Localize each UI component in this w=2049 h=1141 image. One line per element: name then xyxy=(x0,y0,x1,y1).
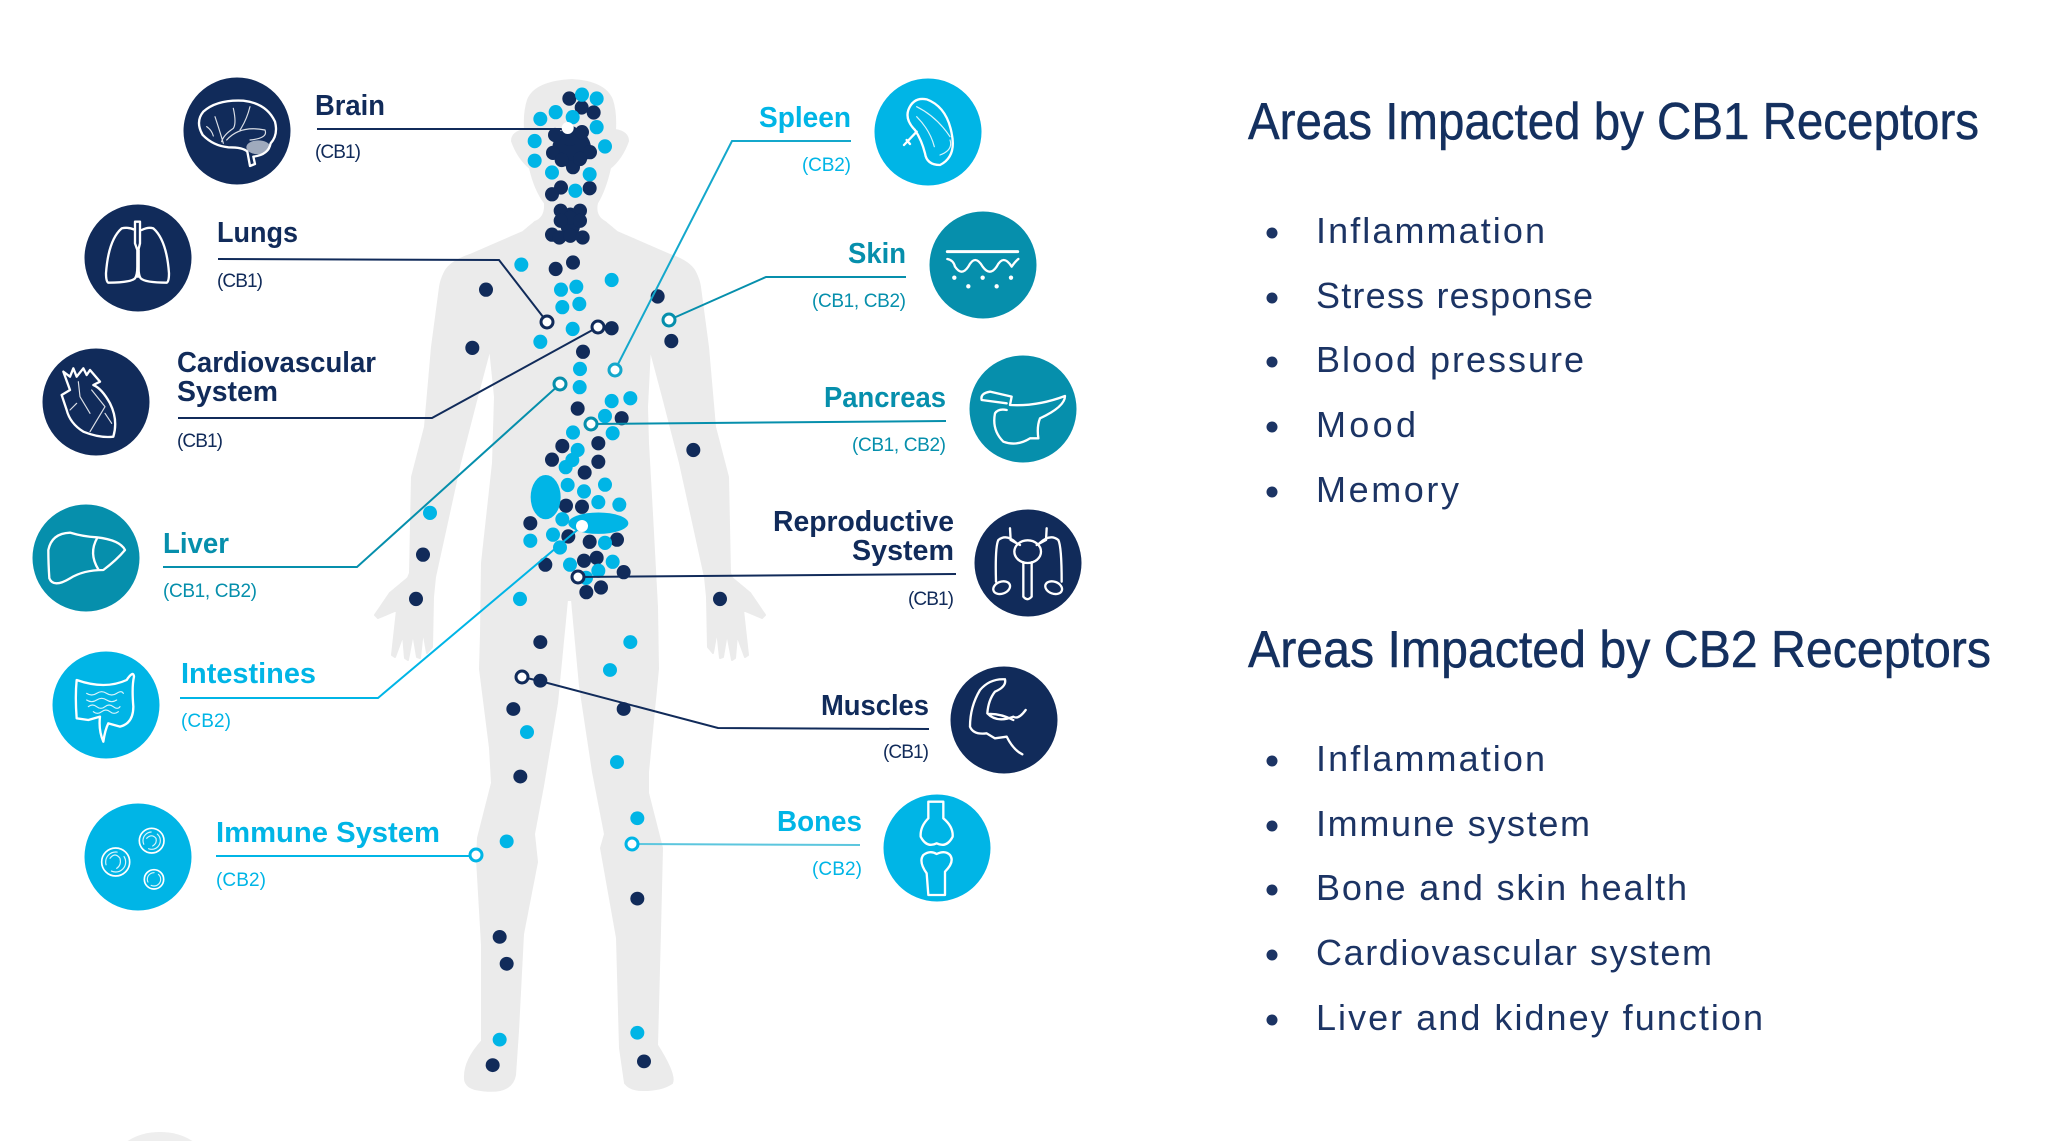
list: CB2 areas xyxy=(1266,738,1763,1038)
Skin receptor tag: (CB1, CB2) xyxy=(812,291,906,312)
Immune System leader line xyxy=(216,855,476,857)
label: Bones xyxy=(626,794,990,902)
Brain receptor tag: (CB1) xyxy=(315,142,361,163)
label: Intestines xyxy=(52,520,588,758)
System heading line: System xyxy=(852,535,954,567)
cyan CB2 dots upper body xyxy=(423,87,637,606)
Muscles heading: Muscles xyxy=(821,690,929,722)
receptor dots on legs xyxy=(486,635,651,1072)
icon: spleen xyxy=(874,78,982,186)
label: Immune System xyxy=(84,804,482,910)
Reproductive heading: Reproductive xyxy=(773,506,954,538)
list: CB1 areas xyxy=(1266,210,1593,510)
Cardiovascular heading: Cardiovascular xyxy=(177,347,376,379)
panel: CB2 receptor areas xyxy=(1248,621,1991,1038)
label: Pancreas xyxy=(585,356,1076,462)
Intestines marker xyxy=(576,520,588,532)
cyan CB2 dots legs xyxy=(493,635,644,1047)
list: CB1 areas: Blood pressure xyxy=(1316,339,1584,380)
Muscles receptor tag: (CB1) xyxy=(883,742,929,763)
label: Liver xyxy=(32,378,566,612)
Bones receptor tag: (CB2) xyxy=(812,859,862,880)
Intestines receptor tag: (CB2) xyxy=(181,711,231,732)
Spleen heading: Spleen xyxy=(759,102,851,134)
Liver marker xyxy=(554,378,566,390)
Immune System receptor tag: (CB2) xyxy=(216,870,266,891)
Brain marker xyxy=(562,122,574,134)
icon: knee joint bones xyxy=(884,794,990,902)
list: CB1 areas: Mood xyxy=(1316,404,1416,445)
Spleen marker xyxy=(609,364,621,376)
icon: immune cells xyxy=(84,804,192,910)
icon: lungs xyxy=(84,204,192,312)
Skin heading: Skin xyxy=(848,238,906,270)
Bones heading: Bones xyxy=(777,806,862,838)
label: Muscles xyxy=(516,666,1058,774)
Reproductive receptor tag: (CB1) xyxy=(908,589,954,610)
Muscles marker xyxy=(516,671,528,683)
Reproductive leader line xyxy=(578,574,956,577)
label: Cardiovascular System xyxy=(42,321,604,456)
label: Brain xyxy=(184,78,574,184)
list: CB2 areas: Bone and skin health xyxy=(1316,867,1687,908)
panel: CB1 receptor areas xyxy=(1248,93,1979,510)
list: CB1 areas: Memory xyxy=(1316,469,1459,510)
Intestines heading: Intestines xyxy=(181,658,316,690)
Cardiovascular leader line xyxy=(178,327,598,418)
Brain leader line xyxy=(317,128,567,130)
list: CB2 areas: Inflammation xyxy=(1316,738,1545,779)
receptor dots on body upper half xyxy=(409,87,727,606)
list: CB2 areas: Cardiovascular system xyxy=(1316,932,1712,973)
icon: brain xyxy=(184,78,290,184)
icon: intestines xyxy=(52,652,160,758)
heading: CB2: Areas Impacted by CB2 Receptors xyxy=(1248,621,1991,679)
bottom edge silhouette fragment xyxy=(116,1132,204,1141)
Immune System marker xyxy=(470,849,482,861)
Muscles leader line xyxy=(522,677,929,729)
icon: heart xyxy=(42,348,150,456)
label: Spleen xyxy=(609,78,982,376)
list: CB2 areas: Immune system xyxy=(1316,803,1590,844)
Immune System heading: Immune System xyxy=(216,817,440,849)
label: Lungs xyxy=(84,204,553,328)
Intestines leader line xyxy=(180,526,582,698)
label: Skin xyxy=(663,212,1036,326)
icon: pancreas xyxy=(970,356,1076,462)
list: CB2 areas: Liver and kidney function xyxy=(1316,997,1763,1038)
Pancreas leader line xyxy=(591,421,946,424)
Liver heading: Liver xyxy=(163,528,229,560)
icon: flexed arm muscle xyxy=(950,666,1058,774)
navy CB1 dots legs xyxy=(486,635,651,1072)
Pancreas marker xyxy=(585,418,597,430)
Skin marker xyxy=(663,314,675,326)
Cardiovascular marker xyxy=(592,321,604,333)
human body silhouette xyxy=(375,80,765,1091)
Liver leader line xyxy=(163,384,560,567)
Liver receptor tag: (CB1, CB2) xyxy=(163,581,257,602)
System heading line: System xyxy=(177,376,278,408)
Brain heading: Brain xyxy=(315,90,385,122)
icon: skin layers xyxy=(930,212,1036,318)
list: CB1 areas: Inflammation xyxy=(1316,210,1545,251)
Pancreas receptor tag: (CB1, CB2) xyxy=(852,435,946,456)
Lungs leader line xyxy=(218,259,547,322)
Skin leader line xyxy=(669,277,906,320)
Pancreas heading: Pancreas xyxy=(824,382,946,414)
Lungs marker xyxy=(541,316,553,328)
navy CB1 dots upper body xyxy=(409,91,727,606)
Cardiovascular receptor tag: (CB1) xyxy=(177,431,223,452)
Spleen leader line xyxy=(615,141,851,370)
Spleen receptor tag: (CB2) xyxy=(802,155,851,176)
icon: reproductive system xyxy=(974,510,1082,616)
Lungs heading: Lungs xyxy=(217,217,298,249)
Lungs receptor tag: (CB1) xyxy=(217,271,263,292)
heading: CB1: Areas Impacted by CB1 Receptors xyxy=(1248,93,1979,151)
list: CB1 areas: Stress response xyxy=(1316,275,1593,316)
icon: liver xyxy=(32,504,140,612)
Bones leader line xyxy=(632,844,860,845)
label: Reproductive System xyxy=(572,506,1082,616)
Reproductive marker xyxy=(572,571,584,583)
Bones marker xyxy=(626,838,638,850)
